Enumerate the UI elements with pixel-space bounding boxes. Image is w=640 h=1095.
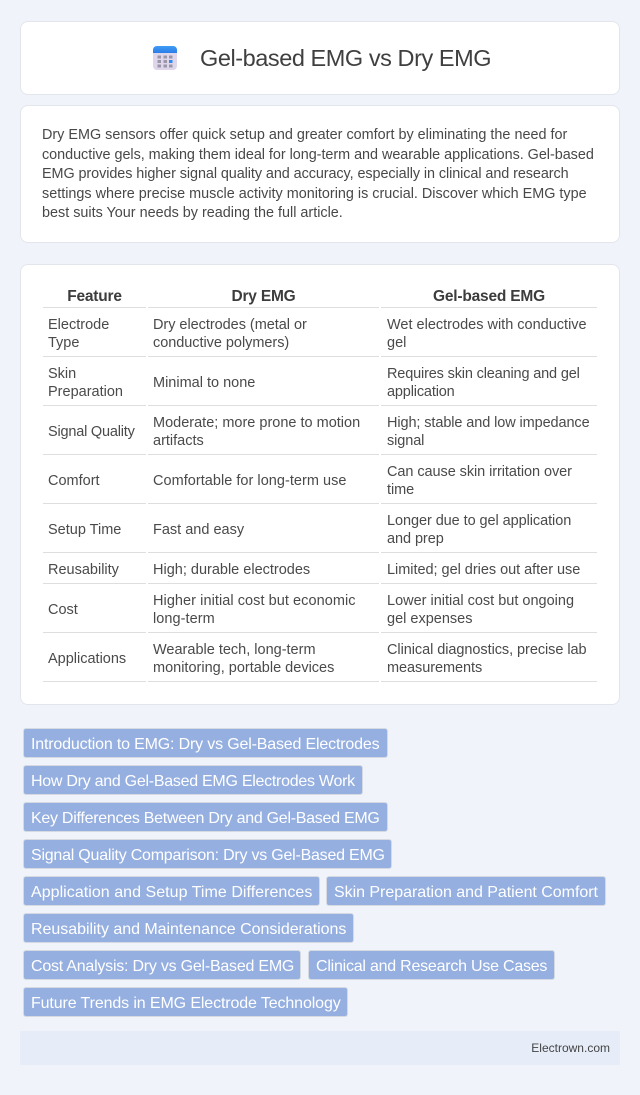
- row: applications: Clinical diagnostics, precise lab: [387, 642, 587, 658]
- tag: how electrodes work: [23, 765, 363, 795]
- row: reusability: Reusability: [48, 562, 119, 578]
- intro text: [42, 127, 594, 221]
- row: electrode type: conductive polymers): [153, 335, 289, 351]
- row: applications: measurements: [387, 660, 482, 676]
- row: skin preparation: Requires skin cleaning and gel: [387, 366, 580, 382]
- tag: reusability: [23, 913, 354, 943]
- row: electrode type: Electrode: [48, 317, 109, 333]
- tag: key differences: [23, 802, 388, 832]
- tag: signal quality: [23, 839, 392, 869]
- row: signal quality: High; stable and low impedance: [387, 415, 590, 431]
- tag: skin preparation: [326, 876, 606, 906]
- row: reusability: Limited; gel dries out after use: [387, 562, 580, 578]
- table header: [43, 288, 597, 308]
- row: skin preparation: Minimal to none: [153, 375, 255, 391]
- row: electrode type: Wet electrodes with conductive: [387, 317, 587, 333]
- title: Gel-based EMG vs Dry EMG: [200, 45, 491, 71]
- row: electrode type: [43, 317, 597, 357]
- row: applications: monitoring, portable devices: [153, 660, 334, 676]
- footer: [20, 1031, 620, 1065]
- row: cost: Cost: [48, 602, 78, 618]
- row: setup time: Setup Time: [48, 522, 121, 538]
- intro panel: [20, 105, 620, 243]
- tag: cost analysis: [23, 950, 301, 980]
- row: electrode type: Dry electrodes (metal or: [153, 317, 307, 333]
- tag: reusability: Reusability and Maintenance Considerations: [31, 921, 346, 938]
- row: signal quality: [43, 415, 597, 455]
- row: comfort: Comfort: [48, 473, 100, 489]
- header panel: [20, 21, 620, 95]
- row: skin preparation: Skin: [48, 366, 76, 382]
- tag: setup time: [23, 876, 320, 906]
- row: reusability: High; durable electrodes: [153, 562, 310, 578]
- row: setup time: Fast and easy: [153, 522, 244, 538]
- row: reusability: [43, 562, 597, 584]
- row: electrode type: gel: [387, 335, 406, 351]
- row: skin preparation: [43, 366, 597, 406]
- tag: skin preparation: Skin Preparation and Patient Comfort: [334, 884, 598, 901]
- tag: future trends: Future Trends in EMG Electrode Technology: [31, 995, 341, 1012]
- row: applications: Applications: [48, 651, 126, 667]
- intro text: conductive gels, making them ideal for long-term and wearable applications. Gel-based: [42, 146, 594, 162]
- intro text: settings where precise muscle activity monitoring is crucial. Discover which EMG type: [42, 186, 587, 202]
- row: comfort: [43, 464, 597, 504]
- tag: cost analysis: Cost Analysis: Dry vs Gel-Based EMG: [31, 958, 294, 975]
- tag: key differences: Key Differences Between Dry and Gel-Based EMG: [31, 810, 380, 827]
- tag: signal quality: Signal Quality Comparison: Dry vs Gel-Based EMG: [31, 847, 385, 864]
- tag: how electrodes work: How Dry and Gel-Based EMG Electrodes Work: [31, 773, 355, 790]
- table header: Feature: [67, 288, 122, 305]
- tag: future trends: [23, 987, 348, 1017]
- table header: Gel-based EMG: [433, 288, 545, 305]
- tag: use cases: [308, 950, 555, 980]
- row: signal quality: Signal Quality: [48, 424, 135, 440]
- row: comfort: time: [387, 482, 414, 498]
- panel: comparison table: [20, 264, 620, 705]
- row: cost: [43, 593, 597, 633]
- row: cost: Lower initial cost but ongoing: [387, 593, 574, 609]
- intro text: EMG provides higher signal quality and accuracy, especially in clinical and research: [42, 166, 569, 182]
- row: setup time: Longer due to gel application: [387, 513, 571, 529]
- row: cost: long-term: [153, 611, 215, 627]
- tag: setup time: Application and Setup Time Differences: [31, 884, 312, 901]
- table header: Dry EMG: [231, 288, 296, 305]
- row: applications: Wearable tech, long-term: [153, 642, 316, 658]
- icon: calendar: [153, 46, 177, 70]
- intro text: Dry EMG sensors offer quick setup and greater comfort by eliminating the need for: [42, 127, 567, 143]
- row: cost: Higher initial cost but economic: [153, 593, 356, 609]
- row: comfort: Can cause skin irritation over: [387, 464, 572, 480]
- row: cost: gel expenses: [387, 611, 472, 627]
- row: skin preparation: Preparation: [48, 384, 123, 400]
- row: comfort: Comfortable for long-term use: [153, 473, 346, 489]
- tag: use cases: Clinical and Research Use Cases: [316, 958, 547, 975]
- row: signal quality: Moderate; more prone to motion: [153, 415, 360, 431]
- row: applications: [43, 642, 597, 682]
- row: setup time: [43, 513, 597, 553]
- footer credit: Electrown.com: [531, 1041, 610, 1055]
- tag: introduction: Introduction to EMG: Dry vs Gel-Based Electrodes: [31, 736, 379, 753]
- row: setup time: and prep: [387, 531, 444, 547]
- intro text: best suits Your needs by reading the full article.: [42, 205, 343, 221]
- row: electrode type: Type: [48, 335, 79, 351]
- row: signal quality: artifacts: [153, 433, 204, 449]
- row: skin preparation: application: [387, 384, 455, 400]
- row: signal quality: signal: [387, 433, 424, 449]
- tag: introduction: [23, 728, 388, 758]
